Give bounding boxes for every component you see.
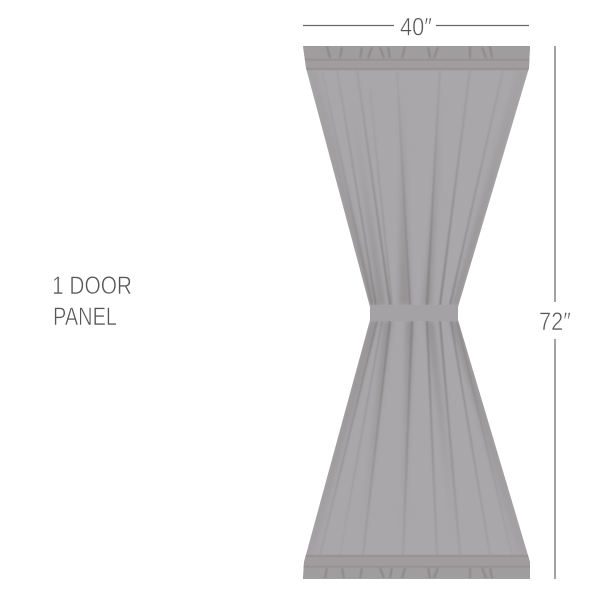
lower wide shadows	[324, 321, 508, 500]
label: 1 door panel	[52, 272, 132, 331]
upper wide shadows	[330, 139, 502, 305]
width dimension: 40 inches: 40″	[400, 14, 432, 42]
upper folds	[342, 87, 496, 305]
height dimension: 72 inches: 72″	[539, 308, 571, 336]
label: 1 door panel: 1 DOOR	[52, 272, 132, 300]
tie-back band	[370, 305, 458, 321]
top header band	[300, 46, 535, 70]
curtain panel	[295, 40, 540, 585]
label: 1 door panel: PANEL	[53, 303, 117, 331]
lower folds	[325, 321, 493, 550]
bottom hem band	[300, 555, 535, 579]
